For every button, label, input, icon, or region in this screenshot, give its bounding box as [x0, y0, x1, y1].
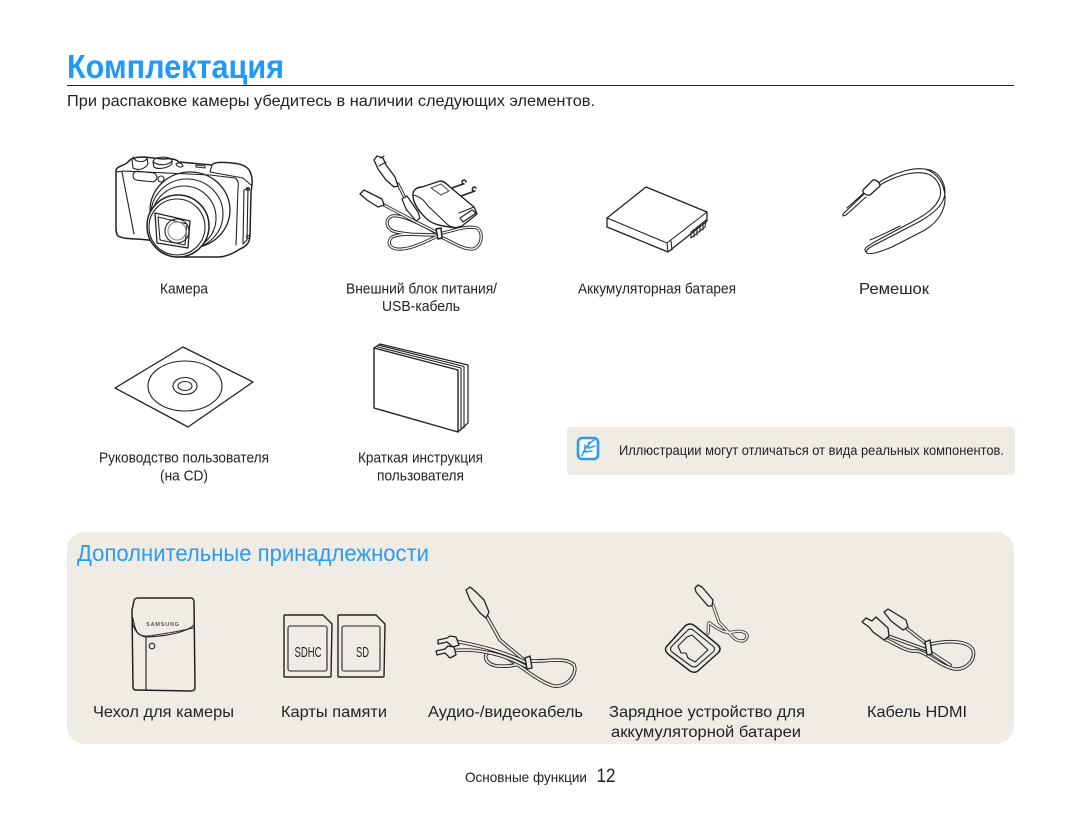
icon: HDMI cable: [862, 609, 974, 669]
item: quick guide: [358, 344, 483, 484]
item: camera: [116, 157, 252, 298]
footer: page label: Основные функции: [465, 769, 587, 785]
icon: AV cable: [436, 587, 575, 686]
item: battery: [578, 187, 736, 298]
icon: booklet: [374, 344, 468, 432]
footer: page label: [465, 765, 616, 787]
label: USB cable: USB-кабель: [382, 299, 460, 315]
icon: camera: [116, 157, 252, 257]
page number: 12: [596, 765, 616, 787]
icon: strap: [843, 169, 945, 254]
label: charger line 2: аккумуляторной батареи: [611, 724, 801, 741]
icon: case: SAMSUNG: [146, 622, 180, 628]
intro text: При распаковке камеры убедитесь в наличии следующих элементов.: [67, 93, 595, 110]
label: adapter: Внешний блок питания/: [346, 282, 498, 298]
panel heading: Дополнительные принадлежности: [77, 540, 429, 566]
accessory: memory cards: [281, 615, 387, 721]
label: on CD: (на CD): [160, 468, 208, 484]
item: CD manual: [99, 347, 269, 484]
label: camera: Камера: [160, 282, 209, 298]
label: battery: Аккумуляторная батарея: [578, 282, 736, 298]
icon: case: [132, 598, 195, 691]
accessory: HDMI cable: [862, 609, 974, 721]
label: memory cards: Карты памяти: [281, 704, 387, 721]
panel: optional accessories: [67, 532, 1014, 744]
icon: adapter and cable: [360, 156, 481, 249]
accessory: battery charger: [609, 585, 805, 741]
item: strap: [843, 169, 945, 298]
label: strap: Ремешок: [859, 281, 930, 298]
title: Комплектация: [67, 48, 284, 85]
accessory: AV cable: [428, 587, 583, 721]
label: camera case: Чехол для камеры: [93, 704, 234, 721]
icon: charger: [666, 585, 747, 672]
label: quick guide: Краткая инструкция: [358, 450, 483, 466]
icon: battery: [607, 187, 707, 252]
accessory: camera case: [93, 598, 234, 721]
item: power adapter and USB cable: [346, 156, 498, 315]
label: HDMI cable: Кабель HDMI: [867, 704, 967, 721]
icon: SDHC card: SDHC: [294, 644, 322, 661]
icon: note pencil: [578, 438, 598, 459]
note text: Иллюстрации могут отличаться от вида реальных компонентов.: [619, 442, 1004, 458]
label: user: пользователя: [377, 468, 464, 484]
icon: CD: [115, 347, 253, 427]
callout: note: [567, 427, 1015, 475]
icon: SD card: SD: [356, 644, 369, 661]
label: AV cable: Аудио-/видеокабель: [428, 704, 583, 721]
label: charger line 1: Зарядное устройство для: [609, 704, 805, 721]
label: user manual: Руководство пользователя: [99, 450, 269, 466]
